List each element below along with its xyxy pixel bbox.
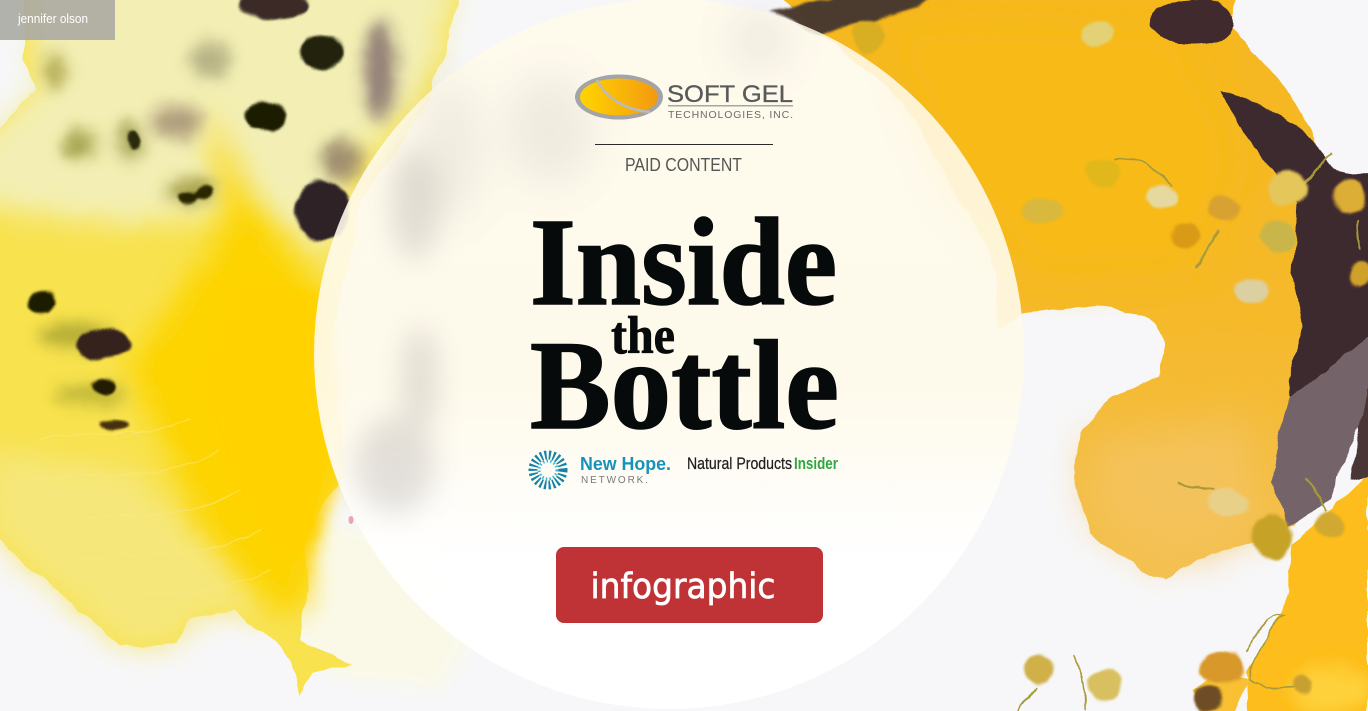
chamomile flowers bbox=[854, 20, 1368, 711]
title: Inside the Bottle bbox=[530, 194, 839, 456]
saturated yellow fan bbox=[127, 105, 335, 610]
flower heads bbox=[854, 20, 1368, 711]
title: Inside the Bottle: Bottle bbox=[530, 316, 839, 456]
lower right yellow pool bbox=[1247, 472, 1368, 711]
dark blots bbox=[28, 0, 348, 429]
dark dust and specks on the left spill bbox=[28, 0, 396, 429]
faint texture inside the circle bbox=[348, 10, 790, 524]
logo: Soft Gel Technologies: TECHNOLOGIES, INC. bbox=[668, 109, 793, 121]
flower stems bbox=[1018, 154, 1359, 711]
button: infographic: infographic bbox=[590, 567, 776, 607]
logo: Soft Gel Technologies bbox=[575, 74, 793, 121]
logo: New Hope Network: NETWORK. bbox=[581, 475, 648, 486]
ripple streaks bbox=[30, 420, 270, 600]
author tag bbox=[0, 0, 115, 40]
logo: Natural Products Insider: Insider bbox=[794, 454, 838, 473]
logo: Natural Products Insider: Natural Products bbox=[687, 454, 792, 473]
paid content label: PAID CONTENT bbox=[625, 155, 742, 175]
right amber oil spill bbox=[770, 0, 1368, 711]
logo: New Hope Network bbox=[533, 454, 671, 486]
logo: New Hope Network: New Hope. bbox=[580, 454, 671, 474]
icon: soft gel capsule bbox=[575, 74, 663, 120]
title: Inside the Bottle: the bbox=[611, 307, 675, 365]
pale dusty upper area bbox=[0, 0, 460, 260]
lower pale yellow ripple area bbox=[0, 450, 290, 648]
logo wordmark: SOFT GEL bbox=[667, 81, 793, 108]
central translucent circle bbox=[314, 0, 1024, 709]
title: Inside the Bottle: Inside bbox=[530, 194, 837, 332]
cream spill under the circle bbox=[300, 520, 470, 690]
rule above paid content bbox=[595, 144, 773, 145]
button: infographic bbox=[556, 547, 823, 623]
dark seed powder streak bbox=[770, 0, 1368, 526]
icon: teal starburst bbox=[533, 455, 563, 485]
olive and purple dust bbox=[39, 20, 396, 405]
left yellow oil spill bbox=[0, 0, 460, 696]
author tag: jennifer olson bbox=[17, 12, 88, 26]
